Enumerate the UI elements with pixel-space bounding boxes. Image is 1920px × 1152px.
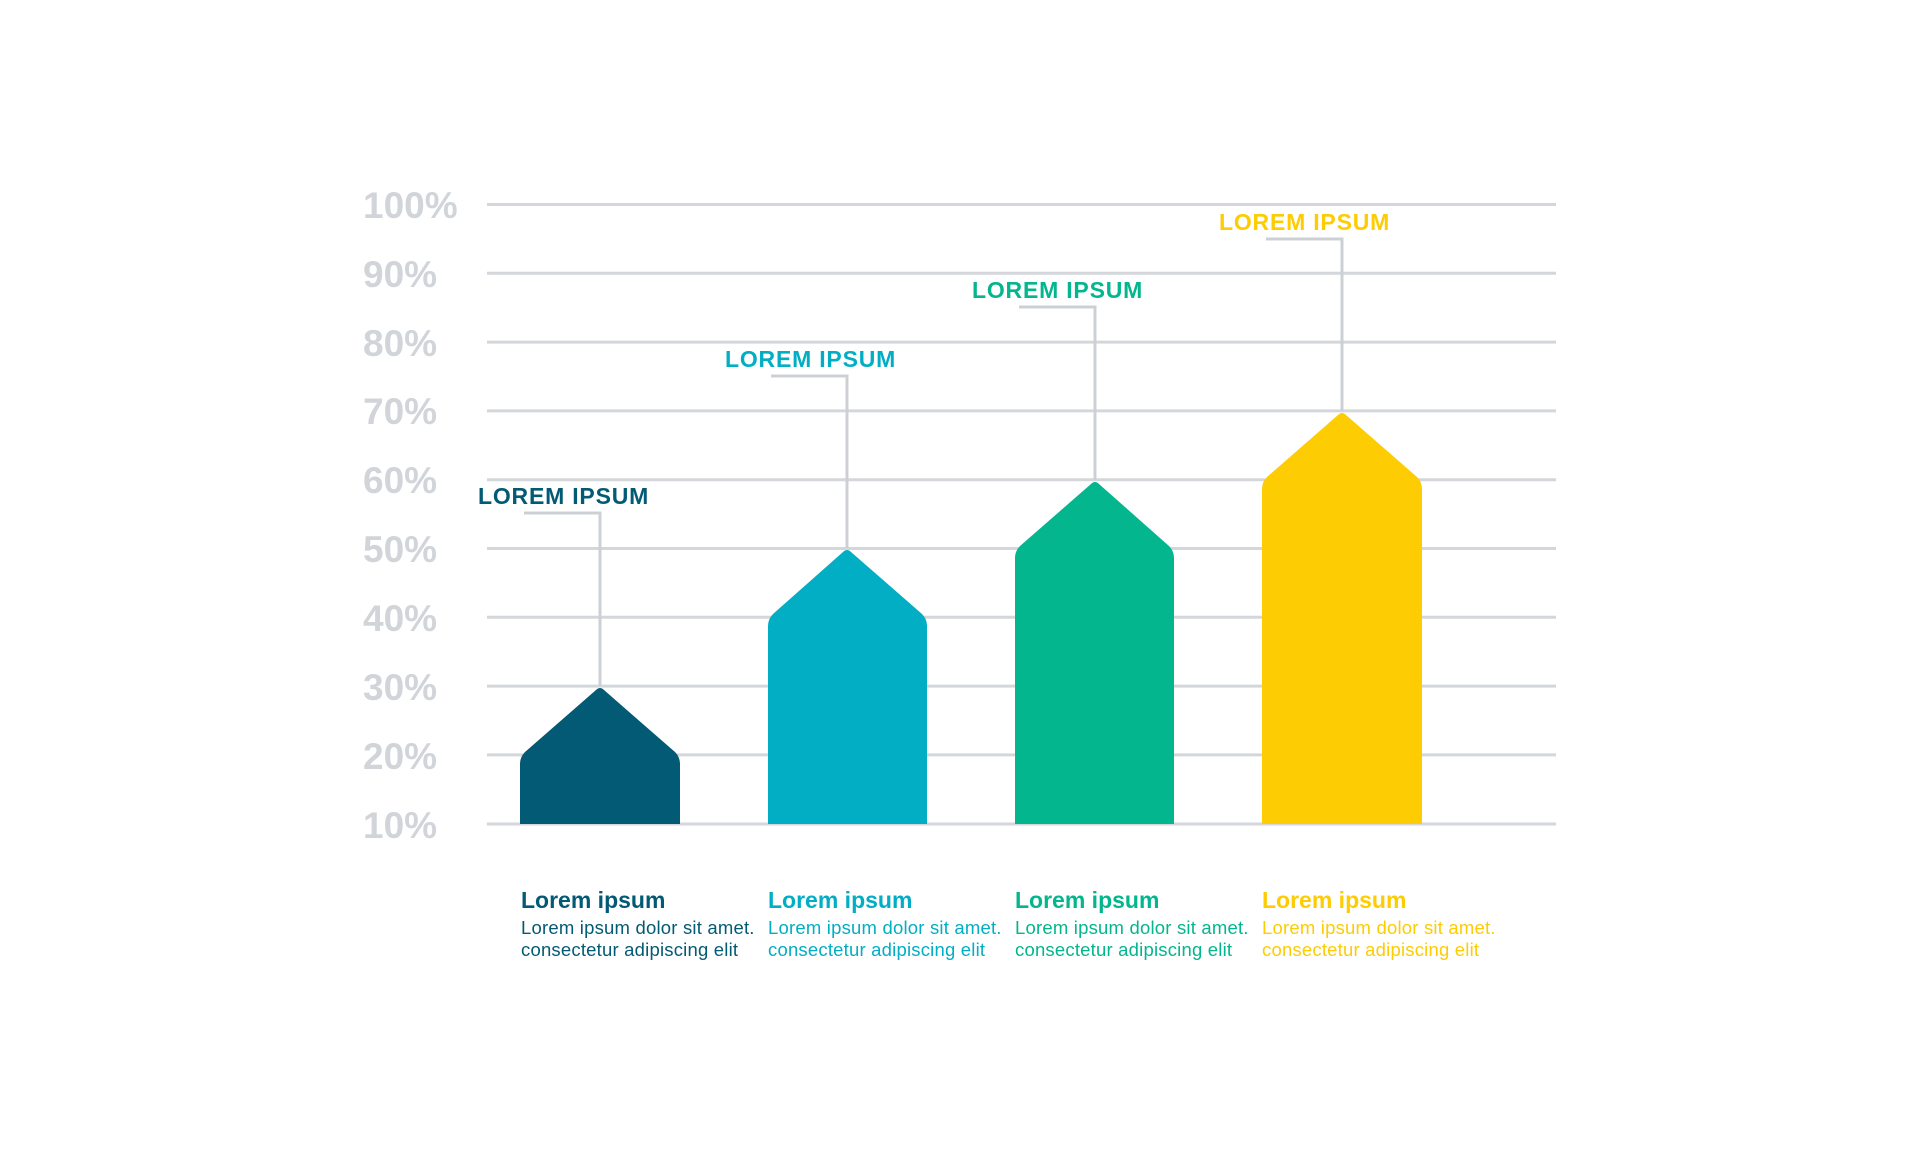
caption 2: Lorem ipsum <box>768 887 912 913</box>
caption 2: consectetur adipiscing elit <box>768 939 985 960</box>
bar labels <box>478 209 1390 509</box>
y-axis labels: 70% <box>363 391 437 432</box>
caption 3: Lorem ipsum dolor sit amet. <box>1015 917 1249 938</box>
caption 1: consectetur adipiscing elit <box>521 939 738 960</box>
leader lines <box>524 239 1342 686</box>
bar 4 <box>1262 413 1422 824</box>
bar 3 <box>1015 482 1174 824</box>
caption 4 <box>1262 887 1496 960</box>
bar labels: LOREM IPSUM <box>972 277 1143 303</box>
caption 3 <box>1015 887 1249 960</box>
y-axis labels <box>363 185 458 846</box>
caption 3: Lorem ipsum <box>1015 887 1159 913</box>
caption 4: consectetur adipiscing elit <box>1262 939 1479 960</box>
y-axis labels: 30% <box>363 667 437 708</box>
y-axis labels: 20% <box>363 736 437 777</box>
bar labels: LOREM IPSUM <box>725 346 896 372</box>
bar labels: LOREM IPSUM <box>1219 209 1390 235</box>
y-axis labels: 50% <box>363 529 437 570</box>
bar 1 <box>520 688 680 824</box>
y-axis labels: 40% <box>363 598 437 639</box>
y-axis labels: 100% <box>363 185 458 226</box>
caption 2 <box>768 887 1002 960</box>
caption 1: Lorem ipsum <box>521 887 665 913</box>
caption 1: Lorem ipsum dolor sit amet. <box>521 917 755 938</box>
caption 4: Lorem ipsum <box>1262 887 1406 913</box>
y-axis labels: 10% <box>363 805 437 846</box>
y-axis labels: 90% <box>363 254 437 295</box>
bar labels: LOREM IPSUM <box>478 483 649 509</box>
caption 2: Lorem ipsum dolor sit amet. <box>768 917 1002 938</box>
bar 2 <box>768 550 927 824</box>
y-axis labels: 80% <box>363 323 437 364</box>
caption 3: consectetur adipiscing elit <box>1015 939 1232 960</box>
caption 1 <box>521 887 755 960</box>
y-axis labels: 60% <box>363 460 437 501</box>
caption 4: Lorem ipsum dolor sit amet. <box>1262 917 1496 938</box>
grid lines <box>487 204 1556 824</box>
